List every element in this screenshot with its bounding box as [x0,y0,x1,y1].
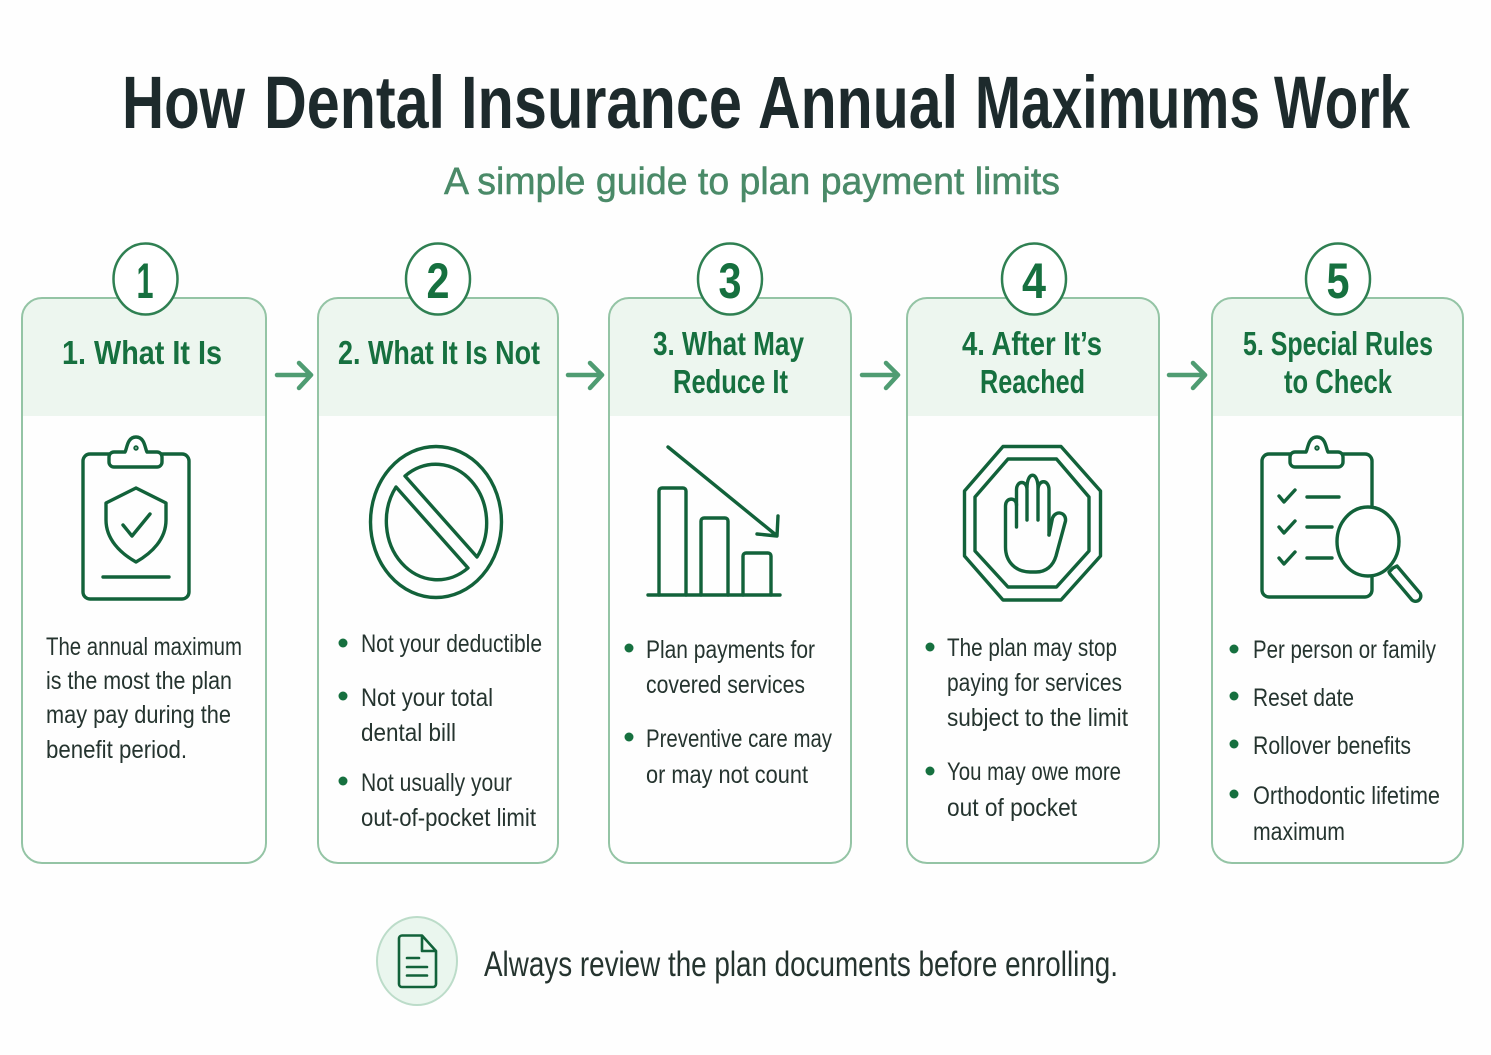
arrow 4 to 5 [1169,363,1205,388]
panel: step 5: Reset date [1253,684,1354,712]
panel: step 3: Reduce It [673,363,788,400]
panel: step 5: Rollover benefits [1253,732,1411,760]
title: Dental [264,61,445,144]
panel: step 1 [22,244,266,863]
panel: step 4: subject to the limit [947,704,1128,732]
panel: step 5: 5 [1326,253,1350,309]
panel: step 3 [609,244,851,863]
arrow 2 to 3 [568,363,602,388]
panel: step 3: or may not count [646,761,808,789]
panel: step 5: Per person or family [1253,636,1436,664]
panel: step 1: 1. What It Is [62,334,222,371]
panel: step 5: 5. Special Rules [1243,325,1433,362]
panel: step 2: Not usually your [361,769,512,797]
icon: prohibition sign [370,446,502,598]
title: Insurance [461,61,742,144]
arrow 1 to 2 [277,363,311,388]
panel: step 4: 4 [1022,253,1046,309]
title [122,61,1411,144]
icon: document [377,917,457,1005]
title: How [122,61,245,144]
panel: step 3: 3 [718,253,742,309]
panel: step 4: Reached [980,363,1085,400]
icon: clipboard with shield [83,437,189,599]
panel: step 2: dental bill [361,719,456,747]
panel: step 2: Not your deductible [361,630,542,658]
icon: stop sign with hand [964,446,1100,600]
icon: checklist with magnifier [1262,437,1421,601]
panel: step 2 [318,244,558,863]
subtitle: A simple guide to plan payment limits [444,161,1060,203]
panel: step 5 [1212,244,1463,863]
title: Annual [758,61,958,144]
panel: step 3: covered services [646,671,805,699]
panel: step 5: to Check [1284,363,1392,400]
panel: step 4: paying for services [947,669,1122,697]
icon: declining bar chart [648,447,780,595]
callout: review reminder: Always review the plan documents before enrolling. [484,945,1118,984]
panel: step 1: may pay during the [46,701,231,729]
panel: step 3: Plan payments for [646,636,815,664]
panel: step 5: Orthodontic lifetime [1253,782,1440,810]
title: Work [1274,61,1411,144]
panel: step 4: You may owe more [947,758,1121,786]
title: Maximums [975,61,1260,144]
callout: review reminder [377,917,1118,1005]
panel: step 1: benefit period. [46,736,187,764]
panel: step 5: maximum [1253,818,1345,846]
panel: step 1: is the most the plan [46,667,232,695]
panel: step 2: Not your total [361,684,493,712]
panel: step 1: The annual maximum [46,633,242,661]
panel: step 4: 4. After It’s [962,325,1102,362]
panel: step 1: 1 [136,253,154,309]
panel: step 2: 2. What It Is Not [338,334,540,371]
panel: step 3: 3. What May [653,325,805,362]
arrow 3 to 4 [862,363,898,388]
panel: step 4: out of pocket [947,794,1077,822]
panel: step 4: The plan may stop [947,634,1117,662]
panel: step 3: Preventive care may [646,725,832,753]
panel: step 4 [907,244,1159,863]
panel: step 2: out-of-pocket limit [361,804,536,832]
panel: step 2: 2 [426,253,450,309]
